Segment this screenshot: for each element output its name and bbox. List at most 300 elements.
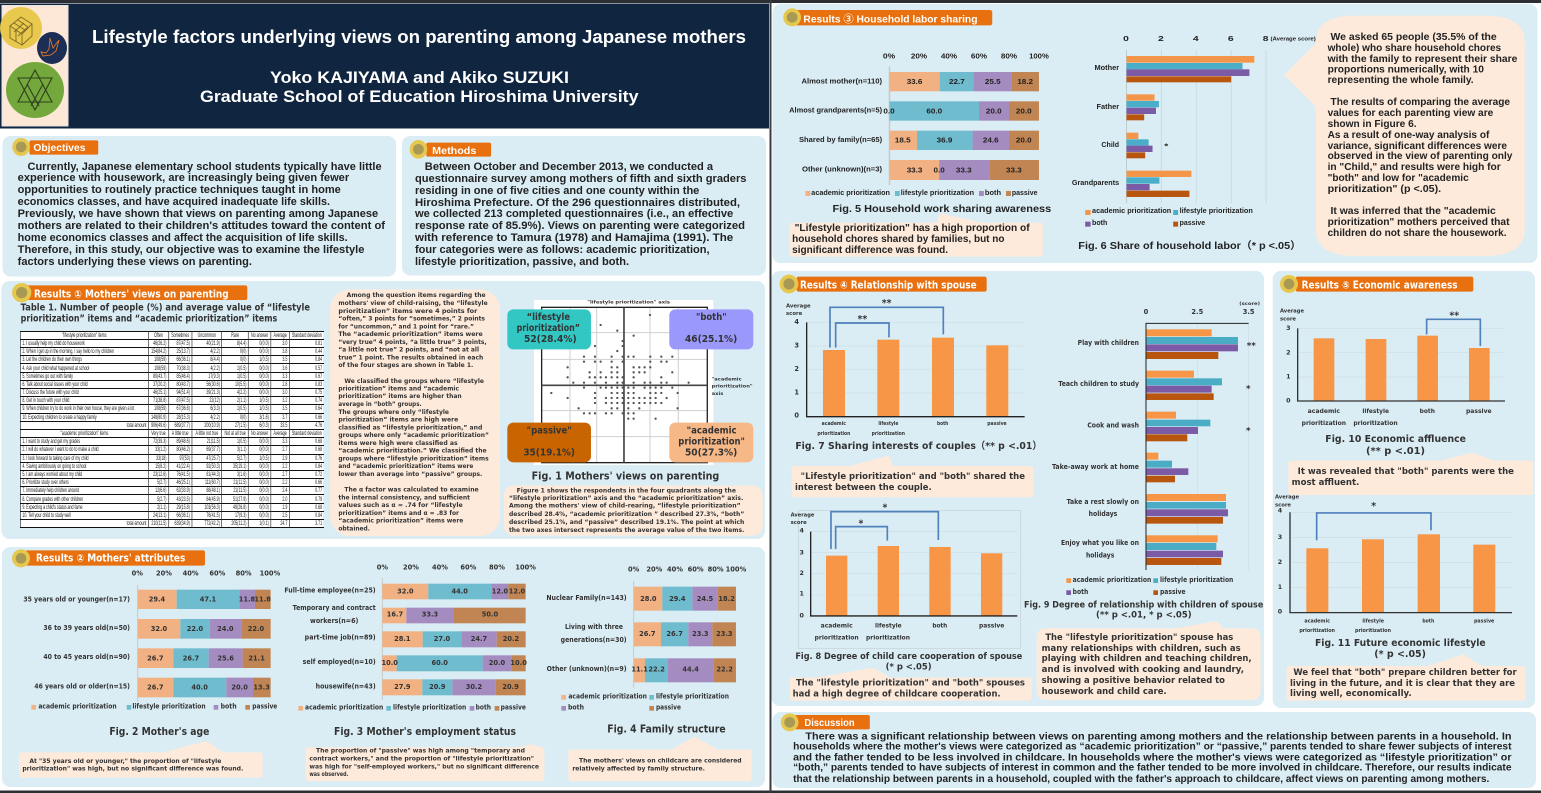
table 1: 154(84.2)	[151, 348, 166, 355]
chart: fig 2 mother's age: 40%	[183, 570, 199, 578]
table 1: 0(0.0)	[259, 373, 269, 380]
chart: fig 9 relationship with children: holidays	[1086, 552, 1114, 560]
callout: fig 3 finding: contract workers," and the proportion of "lifestyle prioritization"	[309, 755, 534, 762]
table 1: 49(26.8)	[233, 504, 246, 511]
text bubble: question items and classification: “academic prioritization” items were	[338, 517, 464, 525]
chart: fig 7 sharing interests of couples: 0	[794, 412, 799, 420]
heading: results 2	[12, 549, 205, 567]
chart: fig 2 mother's age	[23, 570, 281, 711]
chart: fig 9 relationship with children	[1052, 301, 1260, 596]
table 1: 205(11.2)	[231, 520, 246, 527]
table 1: Standard deviation	[292, 332, 322, 339]
table 1: 148(80.9)	[151, 414, 166, 421]
heading: results 1: Results ① Mothers' views on parenting	[34, 288, 229, 300]
table 1: 21(11.5)	[233, 487, 246, 494]
table 1: 3.6	[282, 365, 287, 372]
text bubble: question items and classification: obtained.	[338, 524, 370, 532]
table 1: 4(2.2)	[210, 414, 220, 421]
authors and affiliation: Graduate School of Education Hiroshima University	[200, 87, 639, 106]
text block: objectives: Previously, we have shown that views on parenting among Japanese	[18, 207, 378, 219]
chart: fig 5 household work sharing awareness: 33.3	[956, 166, 972, 174]
chart: fig 5 household work sharing awareness: lifestyle prioritization	[901, 189, 974, 197]
callout: fig 2 finding: At "35 years old or younger," the proportion of "lifestyle	[29, 758, 221, 765]
chart: fig 7 sharing interests of couples: both	[937, 421, 949, 427]
chart: fig 10 economic affluence: **	[1449, 311, 1459, 322]
table 1: No answer	[251, 332, 268, 339]
chart: fig 2 mother's age: 11.8	[254, 596, 271, 604]
table 1: 0.81	[315, 340, 322, 347]
table 1: 0(0.0)	[259, 365, 269, 372]
table 1: 0(0.0)	[259, 496, 269, 503]
text block: objectives	[18, 160, 385, 267]
table 1: 0.77	[315, 487, 322, 494]
text bubble: question items and classification: items were high were classified as	[338, 439, 458, 447]
chart: fig 2 mother's age: 46 years old or older(n=15)	[34, 682, 130, 690]
chart: fig 9 relationship with children: *	[1246, 385, 1251, 395]
chart: fig 7 sharing interests of couples: 2	[794, 365, 799, 373]
callout bubble: fig 6 explanation: representing the whole family.	[1328, 74, 1474, 85]
table 1: 8. Compare grades with other children	[22, 496, 83, 503]
table 1: 97(53)	[179, 455, 190, 462]
chart: fig 3 employment status: 40%	[432, 564, 448, 572]
chart: fig 9 relationship with children: Take-away work at home	[1052, 463, 1139, 471]
callout bubble: fig 6 explanation: proportions numerically, with 10	[1328, 64, 1484, 75]
table 1: 41(22.4)	[176, 463, 190, 470]
table 1: 2(1.1)	[157, 504, 166, 511]
table title: Table 1. Number of people (%) and average value of “lifestyle	[21, 303, 310, 314]
table 1: 33(18)	[156, 455, 166, 462]
chart: fig 6 share of household labor: Grandparents	[1072, 179, 1119, 187]
chart: fig 9 relationship with children: **	[1247, 341, 1256, 351]
chart: fig 11 future economic lifestyle: prioritization	[1355, 628, 1391, 634]
table 1: 80(43.7)	[176, 381, 190, 388]
callout: fig 4 finding: relatively affected by family structure.	[572, 765, 705, 772]
table 1: 0.68	[315, 504, 322, 511]
table 1: No answer	[251, 430, 268, 437]
table 1: 108(59)	[154, 365, 166, 372]
chart: fig 9 relationship with children: both	[1073, 588, 1089, 596]
chart: fig 6 share of household labor: lifestyle prioritization	[1180, 207, 1253, 215]
quadrant: lifestyle prioritization: 52(28.4%)	[524, 334, 577, 345]
chart: fig 5 household work sharing awareness: 100%	[1029, 52, 1049, 60]
callout: fig 10 finding: It was revealed that "both" parents were the	[1298, 467, 1514, 477]
callout: fig 1 explanation	[504, 486, 763, 536]
chart: fig 5 household work sharing awareness: academic prioritization	[811, 189, 890, 197]
chart: fig 9 relationship with children: holidays	[1089, 510, 1117, 518]
quadrant: academic prioritization: 50(27.3%)	[685, 448, 737, 459]
callout: fig 9 finding: showing a positive behavior related to	[1042, 676, 1225, 686]
table 1: 2.2	[282, 479, 287, 486]
chart: fig 11 future economic lifestyle	[1275, 494, 1512, 634]
table 1: 0.76	[315, 455, 322, 462]
table 1: 39(21.3)	[206, 389, 220, 396]
chart: fig 3 employment status: 20.9	[502, 683, 519, 691]
heading: objectives: Objectives	[33, 142, 85, 153]
table 1: 46(25.1)	[153, 389, 166, 396]
quadrant: lifestyle prioritization	[507, 309, 591, 349]
panel: methods	[402, 136, 766, 276]
chart: fig 7 sharing interests of couples: academic	[822, 421, 846, 427]
heading: discussion	[781, 713, 870, 731]
quadrant: both	[669, 309, 753, 349]
chart: fig 3 employment status	[284, 564, 536, 712]
table 1: 4. Ask your child what happened at school	[22, 365, 89, 372]
chart: fig 2 mother's age: academic prioritization	[38, 703, 117, 711]
table 1: 1. I want to study and get my grades	[22, 438, 80, 445]
table 1: 6. Prioritize study over others	[22, 479, 69, 486]
chart: fig 7 sharing interests of couples: Average	[786, 304, 811, 310]
chart: fig 5 household work sharing awareness: Shared by family(n=65)	[799, 136, 882, 144]
chart: fig 11 future economic lifestyle: both	[1422, 618, 1435, 624]
table 1: 108(59)	[154, 356, 166, 363]
text bubble: question items and classification: groups where only “academic prioritization”	[338, 431, 489, 439]
heading: results 5: Results ⑤ Economic awareness	[1302, 279, 1458, 291]
chart: fig 1 scatter plot with quadrants: "lifestyle prioritization" axis	[587, 299, 670, 305]
title: Lifestyle factors underlying views on parenting among Japanese mothers	[92, 26, 746, 47]
table 1: 10. Expecting children to create a happy family	[22, 414, 97, 421]
chart: fig 2 mother's age: 35 years old or younger(n=17)	[23, 596, 130, 604]
chart: fig 2 mother's age: 22.0	[187, 625, 204, 633]
chart: fig 10 economic affluence: both	[1420, 408, 1435, 415]
figure caption: fig 9	[1024, 600, 1263, 621]
chart: fig 3 employment status: 0%	[377, 564, 388, 572]
chart: fig 8 child care cooperation: Average	[791, 513, 815, 519]
text block: methods: lifestyle prioritization, passive, and both.	[415, 255, 629, 267]
table 1: 108(59)	[154, 405, 166, 412]
table 1: 66(36.1)	[176, 512, 190, 519]
chart: fig 3 employment status: lifestyle prioritization	[393, 704, 467, 712]
table 1: 24(13.1)	[153, 512, 166, 519]
text block: methods: Between October and December 2013, we conducted a	[425, 160, 714, 172]
table 1: 27(1.5)	[235, 422, 246, 429]
chart: fig 2 mother's age: 32.0	[151, 625, 168, 633]
chart: fig 10 economic affluence: lifestyle	[1362, 408, 1389, 415]
table 1: 2.7	[282, 446, 287, 453]
table 1: Rare	[231, 332, 239, 339]
table 1: 80(43.7)	[153, 373, 166, 380]
table 1: 35(19.1)	[233, 463, 246, 470]
chart: fig 2 mother's age: 20%	[156, 570, 172, 578]
chart: fig 3 employment status: academic prioritization	[305, 704, 384, 712]
chart: fig 10 economic affluence: 0	[1286, 397, 1291, 404]
chart: fig 3 employment status: 20.0	[489, 659, 506, 667]
table 1: 40(21.9)	[206, 340, 220, 347]
table 1: 46(25.1)	[176, 479, 190, 486]
table 1: 4(2.2)	[210, 348, 220, 355]
text bubble: question items and classification: The α factor was calculated to examine	[344, 485, 479, 493]
panel: discussion	[772, 712, 1536, 788]
chart: fig 9 relationship with children: Take a rest slowly on	[1067, 498, 1139, 506]
table 1: A little not true	[195, 430, 218, 437]
chart: fig 6 share of household labor: 6	[1228, 35, 1234, 43]
table 1: 4(2.2)	[210, 365, 220, 372]
text block: methods: four categories were as follows: academic prioritization,	[415, 243, 710, 255]
text block: methods: response rate of 85.9%). Views on parenting were categorized	[415, 219, 745, 231]
text bubble: question items and classification: prioritization” items were 4 points for	[338, 307, 478, 315]
table 1: 87(47.5)	[176, 340, 190, 347]
chart: fig 5 household work sharing awareness: 18.5	[895, 136, 911, 144]
table 1: 8. Get in touch with your child	[22, 397, 69, 404]
chart: fig 7 sharing interests of couples: 1	[794, 388, 799, 396]
authors and affiliation	[200, 68, 639, 106]
table 1: 0.74	[315, 397, 322, 404]
chart: fig 8 child care cooperation: 4	[799, 528, 804, 535]
chart: fig 3 employment status: self employed(n=10)	[303, 658, 376, 666]
figure caption: fig 6: Fig. 6 Share of household labor（* p <.05）	[1078, 239, 1301, 251]
callout bubble: fig 6 explanation: shown in Figure 6.	[1328, 118, 1417, 129]
chart: fig 8 child care cooperation: passive	[979, 623, 1004, 630]
table 1: 5(2.7)	[157, 479, 166, 486]
chart: fig 5 household work sharing awareness: 0%	[883, 52, 895, 60]
table 1: 56(30.6)	[206, 381, 220, 388]
chart: fig 3 employment status: 10.0	[510, 659, 527, 667]
table 1: 2.8	[282, 381, 287, 388]
table 1: Standard deviation	[292, 430, 322, 437]
text bubble: question items and classification: prioritization” items and “academic	[338, 384, 459, 392]
chart: fig 8 child care cooperation: 2	[799, 570, 804, 577]
chart: fig 11 future economic lifestyle: passive	[1474, 618, 1495, 624]
table 1: 5(2.7)	[157, 496, 166, 503]
table 1: 1(0.5)	[237, 405, 246, 412]
chart: fig 2 mother's age: 40 to 45 years old(n=90)	[43, 653, 130, 661]
chart: fig 3 employment status: 27.0	[434, 635, 451, 643]
chart: fig 6 share of household labor: 2	[1158, 35, 1164, 43]
table 1: 0(0.0)	[259, 438, 269, 445]
callout: fig 9 finding: playing with children and teaching children,	[1042, 654, 1252, 664]
table 1: 3.0	[282, 340, 287, 347]
text bubble: question items and classification: “academic prioritization.” We classified the	[338, 447, 487, 455]
chart: fig 4 family structure: 80%	[708, 566, 724, 574]
table 1: 0(0.0)	[259, 348, 269, 355]
chart: fig 9 relationship with children: Cook and wash	[1087, 422, 1139, 430]
table 1: 0.83	[315, 381, 322, 388]
table 1: 3. Let the children do their own things	[22, 356, 82, 363]
chart: fig 3 employment status: 12.0	[509, 587, 526, 595]
chart: fig 4 family structure: passive	[656, 704, 681, 712]
callout: fig 4 finding: The mothers' views on childcare are considered	[579, 758, 742, 765]
table 1: 47(25.7)	[206, 455, 220, 462]
text bubble: question items and classification: prioritization” items are high were	[338, 416, 459, 424]
chart: fig 4 family structure: 60%	[688, 566, 704, 574]
chart: fig 2 mother's age: both	[221, 703, 237, 711]
table 1: 0(0)	[240, 348, 246, 355]
chart: fig 8 child care cooperation: *	[859, 518, 864, 529]
table 1: 0(0.0)	[259, 471, 269, 478]
chart: fig 11 future economic lifestyle: *	[1371, 501, 1376, 512]
callout: fig 9 finding	[1037, 621, 1261, 700]
chart: fig 2 mother's age: 60%	[209, 570, 226, 578]
text block: methods: we collected 213 completed questionnaires (i.e., an effective	[414, 207, 733, 219]
chart: fig 5 household work sharing awareness: 60%	[971, 52, 987, 60]
figure caption: fig 11	[1315, 638, 1486, 660]
chart: fig 11 future economic lifestyle: 0	[1278, 609, 1283, 616]
header banner	[0, 4, 769, 128]
text bubble: question items and classification: groups where “lifestyle prioritization” items	[338, 454, 489, 462]
table 1: Not at all true	[224, 430, 246, 437]
chart: fig 3 employment status: 20.2	[503, 635, 520, 643]
quadrant: academic prioritization: prioritization"	[678, 436, 745, 447]
chart: fig 4 family structure: 26.7	[639, 630, 656, 638]
table 1: 67(36.6)	[176, 405, 190, 412]
table 1: 0.68	[315, 446, 322, 453]
table 1: 2.9	[282, 455, 287, 462]
chart: fig 6 share of household labor: 8	[1263, 35, 1269, 43]
chart: fig 4 family structure: 44.4	[682, 666, 699, 674]
chart: fig 5 household work sharing awareness: Almost grandparents(n=5)	[789, 106, 882, 114]
quadrant: passive: "passive"	[527, 425, 572, 436]
callout: fig 7 finding	[792, 456, 1033, 497]
text block: methods: residing in one of five cities and one county within the	[415, 184, 699, 196]
chart: fig 11 future economic lifestyle: 1	[1278, 584, 1282, 591]
panel: results 5 economic awareness	[1273, 271, 1535, 708]
chart: fig 5 household work sharing awareness: 20%	[911, 52, 927, 60]
table 1: 94(51.4)	[176, 389, 190, 396]
table 1: 0(0)	[240, 356, 246, 363]
text bubble: question items and classification: Among the question items regarding the	[347, 291, 486, 299]
table 1: 210(11.5)	[151, 520, 166, 527]
table 1: 0.75	[315, 389, 322, 396]
table 1: "lifestyle prioritization" items	[62, 332, 107, 339]
callout: fig 4 finding	[568, 737, 752, 781]
chart: fig 3 employment status: 10.0	[381, 659, 398, 667]
chart: fig 3 employment status: 20%	[403, 564, 419, 572]
chart: fig 4 family structure: 20%	[646, 566, 663, 574]
table 1: 69(37.7)	[206, 446, 220, 453]
table 1: 0(0.0)	[259, 389, 269, 396]
table 1: 1(0.5)	[259, 455, 269, 462]
table 1: Sometimes	[171, 332, 189, 339]
table 1: 3(1.1)	[237, 446, 246, 453]
table 1: 17(9.3)	[235, 512, 246, 519]
panel: results 4 relationship with spouse	[772, 271, 1264, 706]
figure caption: fig 11: Fig. 11 Future economic lifestyle	[1315, 638, 1486, 649]
chart: fig 11 future economic lifestyle: 4	[1278, 508, 1283, 515]
table 1: 84(45.9)	[206, 496, 220, 503]
text block: objectives: opportunities to routinely practice techniques taught in home	[18, 183, 341, 195]
chart: fig 2 mother's age: 80%	[236, 570, 252, 578]
chart: fig 6 share of household labor: both	[1092, 219, 1107, 227]
table 1: 1(0.5)	[259, 405, 269, 412]
table 1: 7. Discuss the future with your child	[22, 389, 79, 396]
chart: fig 3 employment status: passive	[501, 704, 526, 712]
chart: fig 4 family structure: Other (unknown)(n=9)	[547, 665, 627, 673]
chart: fig 2 mother's age: 25.6	[217, 654, 234, 662]
figure caption: fig 8: Fig. 8 Degree of child care cooperation of spouse	[795, 652, 1022, 662]
table 1: 76(41.5)	[206, 512, 220, 519]
chart: fig 8 child care cooperation: lifestyle	[875, 623, 902, 630]
heading: results 2: Results ② Mothers' attributes	[36, 553, 185, 565]
figure caption: fig 11: (* p <.05)	[1374, 649, 1426, 660]
table 1: 23(12.6)	[153, 471, 166, 478]
table 1: 43(23.5)	[176, 496, 190, 503]
heading: results 3: Results ③ Household labor sharing	[803, 13, 978, 25]
chart: fig 5 household work sharing awareness: 24.6	[983, 136, 999, 144]
quadrant: both: "both"	[696, 312, 727, 323]
chart: fig 4 family structure: 26.7	[666, 630, 683, 638]
callout: fig 7 finding: interest between the couple.	[795, 483, 932, 493]
callout bubble: fig 6 explanation: "both" and low for "academic	[1328, 172, 1469, 183]
text bubble: question items and classification: We classified the groups where “lifestyle	[344, 377, 485, 385]
chart: fig 4 family structure: 23.3	[716, 630, 733, 638]
chart: fig 3 employment status: Full-time employee(n=25)	[284, 587, 376, 595]
panel: results 3 household labor sharing	[772, 4, 1538, 263]
table 1: 29(15.8)	[176, 504, 190, 511]
chart: fig 2 mother's age: 36 to 39 years old(n=50)	[43, 624, 130, 632]
chart: fig 9 relationship with children: 0	[1144, 308, 1149, 316]
chart: fig 4 family structure: both	[568, 704, 584, 712]
chart: fig 4 family structure: 40%	[667, 566, 683, 574]
heading: methods	[410, 140, 491, 159]
text bubble: question items and classification: “a little not true” 2 points, and “not at all	[338, 346, 479, 354]
text block: objectives: economics classes, and have acquired inadequate life skills.	[18, 195, 330, 207]
figure caption: fig 1: Fig. 1 Mothers' views on parenting	[532, 470, 719, 482]
authors and affiliation: Yoko KAJIYAMA and Akiko SUZUKI	[270, 68, 569, 87]
callout: fig 1 explanation: Among the mothers' view of child-rearing, “lifestyle prioritization”	[509, 502, 741, 510]
chart: fig 9 relationship with children: Play with children	[1078, 339, 1139, 347]
chart: fig 2 mother's age: 21.1	[248, 654, 265, 662]
table 1: total amount	[127, 422, 146, 429]
table 1: 1. I usually help my child do housework	[22, 340, 85, 347]
chart: fig 5 household work sharing awareness	[789, 52, 1049, 197]
chart: fig 3 employment status: 28.1	[394, 635, 411, 643]
chart: fig 5 household work sharing awareness: 40%	[941, 52, 957, 60]
chart: fig 5 household work sharing awareness: Almost mother(n=110)	[801, 77, 882, 85]
table 1: 72(39.3)	[153, 438, 166, 445]
callout: fig 1 explanation: described 25.1%, and “passive” described 19.1%. The point at which	[509, 518, 745, 526]
callout: fig 5 finding: significant difference was found.	[792, 244, 948, 255]
callout: fig 10 finding: most affluent.	[1292, 478, 1359, 488]
table 1: 772(42.2)	[204, 520, 220, 527]
table 1: 66(36.1)	[176, 356, 190, 363]
chart: fig 5 household work sharing awareness: 20.0	[1016, 107, 1032, 115]
callout: fig 11 finding	[1287, 654, 1526, 701]
table 1: 46(26.2)	[153, 340, 166, 347]
chart: fig 10 economic affluence: prioritization	[1353, 420, 1398, 427]
table 1: 1(0.5)	[237, 365, 246, 372]
chart: fig 6 share of household labor: academic prioritization	[1092, 207, 1171, 215]
table 1: 4. Saving ambitiously on going to school	[22, 463, 86, 470]
figure caption: fig 7: Fig. 7 Sharing interests of couples（** p <.01）	[795, 440, 1042, 452]
heading: discussion: Discussion	[804, 717, 855, 728]
chart: fig 4 family structure: 22.2	[648, 666, 665, 674]
chart: fig 7 sharing interests of couples: prioritization	[817, 431, 851, 437]
chart: fig 5 household work sharing awareness: 36.9	[937, 136, 953, 144]
figure caption: fig 8	[795, 652, 1022, 672]
text bubble: question items and classification	[330, 289, 500, 536]
table 1: 2. When I get up in the morning, I say hello to my children	[22, 348, 114, 355]
table 1: 33(1.2)	[155, 446, 166, 453]
chart: fig 8 child care cooperation: score	[791, 520, 807, 526]
table 1: 2.0	[282, 496, 287, 503]
table 1: 3.2	[282, 397, 287, 404]
table title	[21, 303, 310, 325]
chart: fig 2 mother's age: 24.0	[217, 625, 234, 633]
quadrant: both: 46(25.1%)	[685, 334, 737, 345]
table 1: 92(50.3)	[206, 463, 220, 470]
chart: fig 9 relationship with children: Enjoy what you like on	[1061, 539, 1139, 547]
table 1: 4.76	[315, 422, 322, 429]
table 1: 2.5	[282, 512, 287, 519]
text block: objectives: home economics classes and affect the acquisition of life skills.	[18, 231, 348, 243]
chart: fig 7 sharing interests of couples: lifestyle	[878, 421, 899, 427]
chart: fig 7 sharing interests of couples: **	[857, 314, 867, 325]
table 1: 0.64	[315, 405, 322, 412]
quadrant: academic prioritization: "academic	[687, 425, 737, 436]
quadrant: passive	[507, 423, 591, 462]
table 1: 1(0.5)	[259, 397, 269, 404]
chart: fig 2 mother's age: 22.0	[248, 625, 265, 633]
text bubble: question items and classification: “often,” 3 points for “sometimes,” 2 points	[338, 315, 485, 323]
